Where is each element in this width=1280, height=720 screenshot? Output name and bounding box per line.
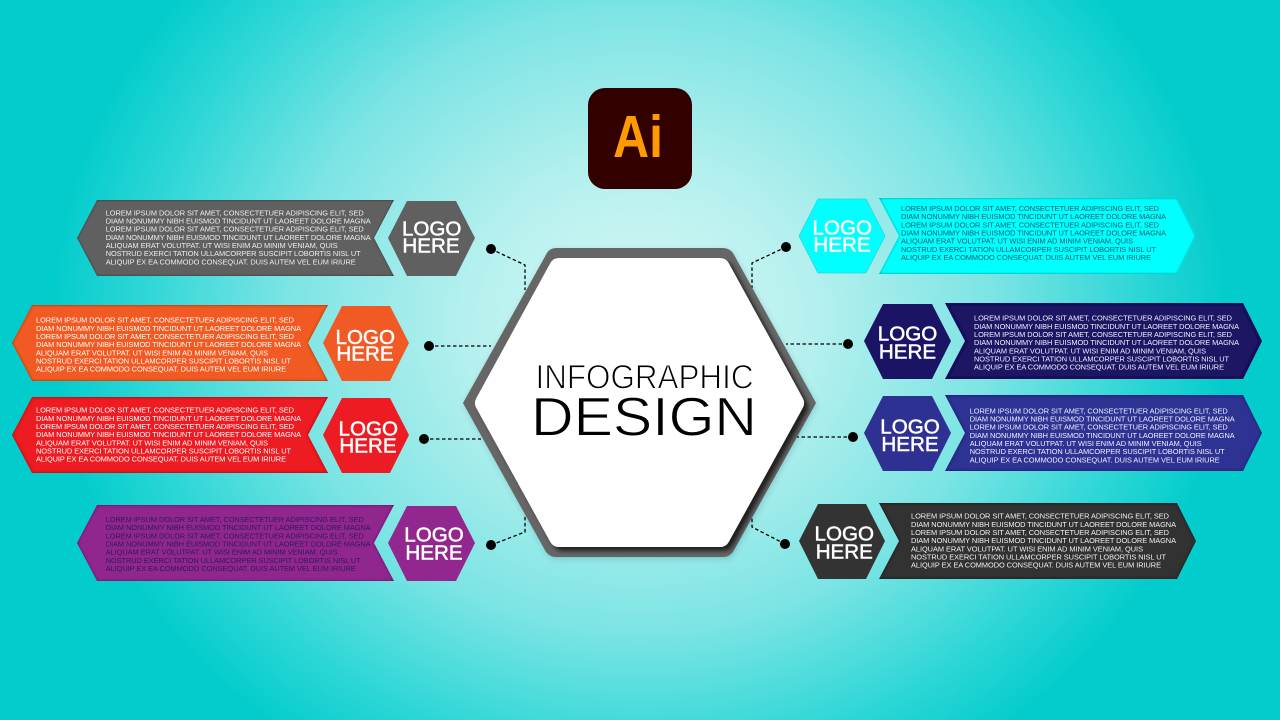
logo hexagon: HERE: [339, 435, 397, 458]
text block: LOREM IPSUM DOLOR SIT AMET, CONSECTETUER ADIPISCING ELIT, SED: [911, 512, 1169, 521]
text block: DIAM NONUMMY NIBH EUISMOD TINCIDUNT UT LAOREET DOLORE MAGNA: [106, 233, 371, 242]
text block: DIAM NONUMMY NIBH EUISMOD TINCIDUNT UT LAOREET DOLORE MAGNA: [911, 520, 1176, 529]
text block: DIAM NONUMMY NIBH EUISMOD TINCIDUNT UT LAOREET DOLORE MAGNA: [106, 217, 371, 226]
text block: NOSTRUD EXERCI TATION ULLAMCORPER SUSCIPIT LOBORTIS NISL UT: [36, 357, 291, 366]
logo hexagon: LOGO: [336, 326, 395, 349]
logo hexagon: LOGO: [339, 418, 398, 441]
text block: NOSTRUD EXERCI TATION ULLAMCORPER SUSCIPIT LOBORTIS NISL UT: [911, 553, 1166, 562]
logo hexagon: [864, 396, 951, 471]
text block: DIAM NONUMMY NIBH EUISMOD TINCIDUNT UT LAOREET DOLORE MAGNA: [36, 324, 301, 333]
text block: DIAM NONUMMY NIBH EUISMOD TINCIDUNT UT LAOREET DOLORE MAGNA: [974, 338, 1239, 347]
panel: cyan: [799, 198, 1196, 274]
text block: LOREM IPSUM DOLOR SIT AMET, CONSECTETUER ADIPISCING ELIT, SED: [901, 204, 1159, 213]
text block: LOREM IPSUM DOLOR SIT AMET, CONSECTETUER ADIPISCING ELIT, SED: [36, 332, 294, 341]
text block: ALIQUIP EX EA COMMODO CONSEQUAT. DUIS AUTEM VEL EUM IRIURE: [901, 253, 1151, 262]
banner: [945, 303, 1262, 379]
logo hexagon: LOGO: [402, 218, 461, 241]
text block: LOREM IPSUM DOLOR SIT AMET, CONSECTETUER ADIPISCING ELIT, SED: [911, 528, 1169, 537]
text block: LOREM IPSUM DOLOR SIT AMET, CONSECTETUER ADIPISCING ELIT, SED: [970, 423, 1228, 432]
text block: ALIQUIP EX EA COMMODO CONSEQUAT. DUIS AUTEM VEL EUM IRIURE: [106, 257, 356, 266]
text block: LOREM IPSUM DOLOR SIT AMET, CONSECTETUER ADIPISCING ELIT, SED: [974, 314, 1232, 323]
text block: LOREM IPSUM DOLOR SIT AMET, CONSECTETUER ADIPISCING ELIT, SED: [106, 531, 364, 540]
connector: orange: [424, 341, 491, 351]
central hexagon: [463, 248, 816, 557]
text block: NOSTRUD EXERCI TATION ULLAMCORPER SUSCIPIT LOBORTIS NISL UT: [901, 245, 1156, 254]
text block: ALIQUAM ERAT VOLUTPAT. UT WISI ENIM AD MINIM VENIAM, QUIS: [901, 237, 1133, 246]
title: DESIGN: [531, 386, 757, 448]
text block: ALIQUIP EX EA COMMODO CONSEQUAT. DUIS AUTEM VEL EUM IRIURE: [974, 363, 1224, 372]
banner: [12, 305, 328, 381]
logo hexagon: LOGO: [878, 323, 937, 346]
connector: red: [419, 434, 481, 444]
logo hexagon: [388, 201, 475, 276]
banner: [77, 200, 394, 276]
text block: ALIQUIP EX EA COMMODO CONSEQUAT. DUIS AUTEM VEL EUM IRIURE: [36, 365, 286, 374]
text block: LOREM IPSUM DOLOR SIT AMET, CONSECTETUER ADIPISCING ELIT, SED: [901, 220, 1159, 229]
text block: [36, 316, 301, 374]
banner: [12, 397, 328, 473]
banner: [945, 395, 1262, 471]
logo hexagon: [323, 306, 409, 381]
logo hexagon: LOGO: [404, 524, 464, 547]
text block: DIAM NONUMMY NIBH EUISMOD TINCIDUNT UT LAOREET DOLORE MAGNA: [970, 431, 1235, 440]
text block: ALIQUIP EX EA COMMODO CONSEQUAT. DUIS AUTEM VEL EUM IRIURE: [911, 561, 1161, 570]
panel: orange: [12, 305, 409, 381]
panel: purple: [77, 505, 475, 581]
text block: [974, 314, 1239, 372]
panel: gray: [77, 200, 475, 276]
text block: LOREM IPSUM DOLOR SIT AMET, CONSECTETUER ADIPISCING ELIT, SED: [36, 316, 294, 325]
logo hexagon: HERE: [816, 540, 873, 563]
text block: DIAM NONUMMY NIBH EUISMOD TINCIDUNT UT LAOREET DOLORE MAGNA: [36, 340, 301, 349]
text block: NOSTRUD EXERCI TATION ULLAMCORPER SUSCIPIT LOBORTIS NISL UT: [974, 355, 1229, 364]
text block: LOREM IPSUM DOLOR SIT AMET, CONSECTETUER ADIPISCING ELIT, SED: [974, 330, 1232, 339]
text block: ALIQUAM ERAT VOLUTPAT. UT WISI ENIM AD MINIM VENIAM, QUIS: [106, 241, 338, 250]
logo hexagon: LOGO: [815, 523, 874, 546]
connector: blue: [797, 432, 858, 442]
logo hexagon: [799, 504, 885, 579]
logo hexagon: LOGO: [880, 415, 940, 438]
text block: DIAM NONUMMY NIBH EUISMOD TINCIDUNT UT LAOREET DOLORE MAGNA: [970, 415, 1235, 424]
logo hexagon: HERE: [879, 340, 936, 363]
panel: dark: [799, 503, 1196, 579]
banner: [879, 198, 1196, 274]
text block: ALIQUAM ERAT VOLUTPAT. UT WISI ENIM AD MINIM VENIAM, QUIS: [106, 548, 338, 557]
text block: DIAM NONUMMY NIBH EUISMOD TINCIDUNT UT LAOREET DOLORE MAGNA: [36, 414, 301, 423]
text block: LOREM IPSUM DOLOR SIT AMET, CONSECTETUER ADIPISCING ELIT, SED: [106, 515, 364, 524]
banner: [879, 503, 1196, 579]
connector: purple: [486, 515, 525, 550]
text block: ALIQUIP EX EA COMMODO CONSEQUAT. DUIS AUTEM VEL EUM IRIURE: [106, 564, 356, 573]
text block: DIAM NONUMMY NIBH EUISMOD TINCIDUNT UT LAOREET DOLORE MAGNA: [901, 229, 1166, 238]
text block: [970, 406, 1235, 464]
text block: NOSTRUD EXERCI TATION ULLAMCORPER SUSCIPIT LOBORTIS NISL UT: [970, 447, 1225, 456]
text block: [36, 406, 301, 464]
logo hexagon: HERE: [813, 234, 871, 257]
logo hexagon: HERE: [402, 234, 460, 257]
text block: ALIQUAM ERAT VOLUTPAT. UT WISI ENIM AD MINIM VENIAM, QUIS: [974, 346, 1206, 355]
text block: [911, 512, 1176, 570]
title: INFOGRAPHIC: [536, 358, 754, 396]
text block: NOSTRUD EXERCI TATION ULLAMCORPER SUSCIPIT LOBORTIS NISL UT: [36, 447, 291, 456]
title: [531, 358, 757, 448]
text block: ALIQUAM ERAT VOLUTPAT. UT WISI ENIM AD MINIM VENIAM, QUIS: [36, 348, 268, 357]
text block: ALIQUAM ERAT VOLUTPAT. UT WISI ENIM AD MINIM VENIAM, QUIS: [911, 544, 1143, 553]
connector: dark: [752, 517, 790, 549]
text block: [106, 515, 371, 573]
text block: NOSTRUD EXERCI TATION ULLAMCORPER SUSCIPIT LOBORTIS NISL UT: [106, 249, 361, 258]
text block: DIAM NONUMMY NIBH EUISMOD TINCIDUNT UT LAOREET DOLORE MAGNA: [901, 212, 1166, 221]
text block: DIAM NONUMMY NIBH EUISMOD TINCIDUNT UT LAOREET DOLORE MAGNA: [36, 430, 301, 439]
text block: LOREM IPSUM DOLOR SIT AMET, CONSECTETUER ADIPISCING ELIT, SED: [36, 406, 294, 415]
panel: blue: [864, 395, 1262, 471]
icon: Adobe Illustrator logo: Ai: [613, 104, 663, 170]
logo hexagon: LOGO: [813, 216, 872, 239]
text block: LOREM IPSUM DOLOR SIT AMET, CONSECTETUER ADIPISCING ELIT, SED: [106, 225, 364, 234]
connector: cyan: [752, 242, 791, 288]
text block: DIAM NONUMMY NIBH EUISMOD TINCIDUNT UT LAOREET DOLORE MAGNA: [106, 540, 371, 549]
text block: NOSTRUD EXERCI TATION ULLAMCORPER SUSCIPIT LOBORTIS NISL UT: [106, 556, 361, 565]
banner: [77, 505, 394, 581]
text block: ALIQUAM ERAT VOLUTPAT. UT WISI ENIM AD MINIM VENIAM, QUIS: [970, 439, 1202, 448]
text block: [106, 208, 371, 266]
text block: DIAM NONUMMY NIBH EUISMOD TINCIDUNT UT LAOREET DOLORE MAGNA: [974, 322, 1239, 331]
logo hexagon: [799, 199, 885, 273]
connector: gray: [486, 244, 525, 290]
icon: Adobe Illustrator logo: [588, 88, 692, 189]
text block: [901, 204, 1166, 262]
logo hexagon: [388, 506, 475, 581]
text block: DIAM NONUMMY NIBH EUISMOD TINCIDUNT UT LAOREET DOLORE MAGNA: [911, 536, 1176, 545]
text block: ALIQUIP EX EA COMMODO CONSEQUAT. DUIS AUTEM VEL EUM IRIURE: [970, 455, 1220, 464]
text block: LOREM IPSUM DOLOR SIT AMET, CONSECTETUER ADIPISCING ELIT, SED: [36, 422, 294, 431]
logo hexagon: HERE: [881, 433, 939, 456]
logo hexagon: HERE: [405, 541, 463, 564]
text block: ALIQUAM ERAT VOLUTPAT. UT WISI ENIM AD MINIM VENIAM, QUIS: [36, 438, 268, 447]
text block: LOREM IPSUM DOLOR SIT AMET, CONSECTETUER ADIPISCING ELIT, SED: [970, 406, 1228, 415]
connector: navy: [786, 339, 853, 349]
text block: ALIQUIP EX EA COMMODO CONSEQUAT. DUIS AUTEM VEL EUM IRIURE: [36, 455, 286, 464]
logo hexagon: HERE: [336, 343, 394, 366]
panel: red: [12, 397, 409, 473]
panel: navy: [864, 303, 1262, 379]
hexagon white face: [485, 268, 794, 537]
text block: LOREM IPSUM DOLOR SIT AMET, CONSECTETUER ADIPISCING ELIT, SED: [106, 208, 364, 217]
hexagon frame: [463, 248, 816, 557]
text block: DIAM NONUMMY NIBH EUISMOD TINCIDUNT UT LAOREET DOLORE MAGNA: [106, 523, 371, 532]
logo hexagon: [864, 304, 951, 379]
logo hexagon: [323, 398, 409, 473]
